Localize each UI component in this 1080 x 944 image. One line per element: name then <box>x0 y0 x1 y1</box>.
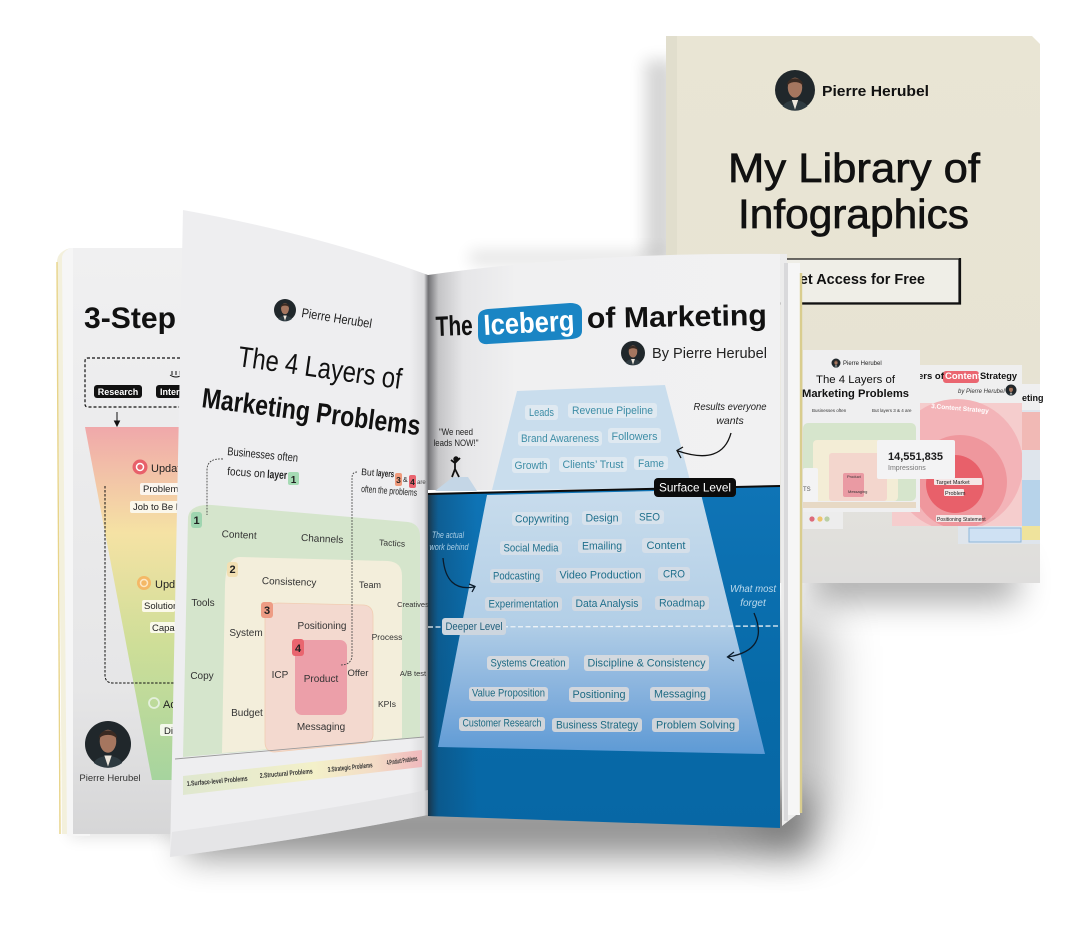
byline text: By Pierre Herubel <box>652 345 767 362</box>
middle chips: CRO <box>663 568 685 580</box>
tip chips: Clients’ Trust <box>562 459 624 471</box>
layer labels: Offer <box>348 668 368 679</box>
layer badges: 3 <box>264 605 270 617</box>
tip chips: Fame <box>638 458 664 470</box>
mini infographic: iceberg-side card: keting <box>1017 393 1044 403</box>
layer badges: 2 <box>229 564 236 576</box>
tip chips: Growth <box>514 460 548 472</box>
iceberg pill <box>478 303 582 344</box>
mini infographic: layers of content strategy: Content <box>945 371 982 382</box>
deeper level tag: Deeper Level <box>446 621 502 633</box>
left page sheet <box>73 248 190 834</box>
impressions stat card: 14,551,835 <box>888 451 943 463</box>
surface level tag <box>654 478 736 497</box>
note: layers three and four: are <box>417 480 426 486</box>
byline <box>621 341 767 365</box>
legend strip: 4.Product Problems <box>386 756 418 767</box>
middle chips: Copywriting <box>515 514 569 526</box>
tip chips: Leads <box>529 407 554 419</box>
deep chips: Problem Solving <box>656 720 735 732</box>
middle page: The 4 Layers of Marketing Problems <box>170 210 429 857</box>
deep chips: Discipline & Consistency <box>588 658 706 670</box>
divider above legend <box>175 737 424 759</box>
layer labels <box>190 529 429 733</box>
annotation: what most forget: What most <box>730 584 777 595</box>
layer two: yellow <box>222 557 402 753</box>
funnel item: update problems: Update <box>151 463 186 475</box>
funnel <box>85 427 195 780</box>
research box: Research <box>98 387 138 397</box>
down arrow <box>114 412 120 426</box>
note: layers three and four: 3 <box>396 475 401 485</box>
note: layers three and four: 4 <box>410 477 415 487</box>
note: layer one: 1 <box>291 475 297 486</box>
layer badges <box>191 512 304 656</box>
middle chips: Data Analysis <box>576 598 639 610</box>
layer badges: 4 <box>295 643 302 655</box>
mini infographic: layers of content strategy: ers of <box>918 371 945 382</box>
middle page author name: Pierre Herubel <box>301 305 373 331</box>
deep chips: Messaging <box>654 688 706 700</box>
mini infographic: the 4 layers of marketing problems: Marketing Problems <box>802 388 909 400</box>
funnel item: update problems <box>130 460 198 513</box>
annotation: results everyone wants: Results everyone <box>694 401 767 413</box>
legend strip: 3.Strategic Problems <box>327 762 373 774</box>
tip chips: Revenue Pipeline <box>572 405 653 417</box>
middle chips: Video Production <box>560 570 642 582</box>
layer labels: KPIs <box>378 699 396 709</box>
layer labels: Team <box>359 580 381 590</box>
title: of Marketing <box>587 300 767 335</box>
impressions stat card <box>877 440 955 479</box>
layer labels: A/B test <box>400 669 427 678</box>
title: Iceberg <box>483 305 575 342</box>
small stat card <box>803 468 818 502</box>
layer one: green <box>183 505 420 757</box>
layer three: peach <box>265 603 373 752</box>
small stat card: TS <box>803 487 811 493</box>
funnel item: add differentiation: Differentiation <box>164 726 222 737</box>
middle chips: Emailing <box>582 540 622 552</box>
right page edges <box>780 254 801 826</box>
cover author name: Pierre Herubel <box>822 83 929 100</box>
layer labels: Copy <box>190 671 214 682</box>
right page: The Iceberg of Marketing <box>428 254 780 828</box>
annotation: we need leads now: "We need <box>439 427 473 438</box>
middle page sheet <box>170 210 428 857</box>
mini infographic: the 4 layers of marketing problems: But layers 3 & 4 are <box>872 408 912 413</box>
layer labels: Content <box>221 529 257 542</box>
middle page avatar <box>274 299 296 321</box>
middle chips: Content <box>646 540 686 552</box>
mini infographic: layers of content strategy <box>891 365 1023 531</box>
left page: 3-Step infographic <box>73 248 222 834</box>
author row <box>274 299 373 331</box>
layer labels: Creatives <box>397 600 429 609</box>
cover avatar <box>775 70 815 111</box>
icon: stick figure with megaphone <box>451 457 460 477</box>
layer labels: Process <box>372 632 402 642</box>
annotation: results everyone wants <box>677 401 767 458</box>
left page author name: Pierre Herubel <box>79 773 141 784</box>
funnel item: update problems: Job to Be Done <box>133 502 198 513</box>
legend strip <box>183 750 422 795</box>
impressions stat card: Impressions <box>888 465 926 472</box>
left page author <box>79 721 141 784</box>
soft drop shadows <box>70 60 1017 857</box>
deep chips: Value Proposition <box>472 688 545 700</box>
mini infographic: layers of content strategy: Target Market <box>936 480 970 486</box>
note: layers three and four <box>361 467 426 499</box>
funnel item: add differentiation: Add <box>163 699 183 711</box>
left page avatar <box>85 721 131 768</box>
middle page title <box>200 341 422 441</box>
cover title: My Library of <box>728 145 981 191</box>
mini infographic: layers of content strategy: Problem <box>945 491 966 497</box>
layer labels: Tactics <box>379 537 405 549</box>
mini infographic: the 4 layers of marketing problems: The 4 Layers of <box>816 374 896 386</box>
layer labels: Tools <box>191 598 215 609</box>
tip chips: Followers <box>612 431 658 443</box>
deep chips: Systems Creation <box>490 658 566 670</box>
deeper level dashed line <box>428 626 780 627</box>
annotation: we need leads now: leads NOW!" <box>434 438 478 449</box>
cover button <box>770 258 960 304</box>
funnel item: update solution <box>137 576 201 634</box>
cover author <box>775 70 929 111</box>
surface line <box>428 486 780 494</box>
mini infographic: the 4 layers of marketing problems <box>802 350 920 512</box>
annotation: we need leads now <box>434 427 478 449</box>
mini infographic: the 4 layers of marketing problems: Messaging <box>848 489 867 494</box>
layer labels: Positioning <box>298 621 346 632</box>
byline avatar <box>621 341 645 365</box>
layer four: red <box>295 640 347 715</box>
note: layer one: layer <box>267 469 288 482</box>
small mound <box>435 477 477 491</box>
layer labels: Channels <box>301 533 344 546</box>
annotation: results everyone wants: wants <box>716 415 744 427</box>
note: layer one: focus on <box>227 466 266 481</box>
middle page title: Marketing Problems <box>200 382 422 441</box>
layer labels: Consistency <box>262 576 316 589</box>
note: layers three and four: layers <box>376 468 395 480</box>
layer badges: 1 <box>193 515 200 527</box>
tip chips <box>512 403 668 473</box>
title: The <box>435 310 473 342</box>
cover title: Infographics <box>738 191 969 237</box>
mini infographic: layers of content strategy: Positioning Statement <box>937 517 986 523</box>
middle chips: Experimentation <box>488 598 558 610</box>
note: layers three and four: often the problems <box>361 484 418 499</box>
mini infographic: iceberg-side card <box>958 384 1044 544</box>
tip chips: Brand Awareness <box>521 433 599 445</box>
annotation: the actual work behind: work behind <box>430 542 469 552</box>
funnel item: update problems: Problems <box>143 484 183 495</box>
left page title: 3-Step <box>84 302 176 335</box>
annotation: the actual work behind <box>430 530 475 592</box>
note: layer one <box>227 446 299 486</box>
legend strip: 1.Surface-level Problems <box>187 776 248 788</box>
layer labels: ICP <box>272 670 289 681</box>
middle page title: The 4 Layers of <box>236 341 405 396</box>
note: layers three and four: & <box>403 477 408 484</box>
middle chips: Design <box>586 512 618 524</box>
dashed feedback line <box>105 486 195 683</box>
right page sheet <box>428 254 780 490</box>
sea <box>428 486 780 828</box>
middle chips: Podcasting <box>493 570 540 582</box>
legend strip: 2.Structural Problems <box>260 768 313 780</box>
research box: Interviews <box>160 387 204 397</box>
layer labels: System <box>229 628 263 639</box>
layer labels: Messaging <box>297 722 345 733</box>
funnel item: update solution: Solution <box>144 601 178 612</box>
mini infographic: layers of content strategy: by Pierre Herubel <box>958 389 1005 395</box>
mini infographic: the 4 layers of marketing problems: Businesses often <box>812 408 847 413</box>
mini infographic: the 4 layers of marketing problems: Pierre Herubel <box>843 361 882 367</box>
cover button: Get Access for Free <box>789 272 925 288</box>
middle chips: Social Media <box>504 542 559 554</box>
note: layer one: Businesses often <box>227 446 299 465</box>
iceberg body <box>438 490 765 754</box>
note: layers three and four: But <box>361 467 375 479</box>
deeper level tag <box>442 618 506 635</box>
deep chips: Positioning <box>572 689 626 701</box>
deep chips: Business Strategy <box>556 720 638 732</box>
mini dots card <box>803 512 843 529</box>
funnel item: update solution: Update <box>155 579 190 591</box>
deep chips <box>459 655 739 732</box>
layer labels: Product <box>304 674 338 685</box>
surface level tag: Surface Level <box>659 480 731 494</box>
back book: My Library of Infographics cover <box>666 36 1044 583</box>
mini infographic: layers of content strategy: Strategy <box>980 371 1018 382</box>
deep chips: Customer Research <box>462 718 542 730</box>
middle chips <box>485 510 709 611</box>
funnel item: update solution: Capabilities <box>152 623 201 634</box>
annotation: the actual work behind: The actual <box>432 530 465 540</box>
annotation: what most forget: forget <box>740 598 767 609</box>
book cover panel <box>666 36 1040 583</box>
mini infographic: layers of content strategy: 3.Content Strategy <box>931 403 989 415</box>
connector lines <box>207 459 357 665</box>
funnel item: add differentiation <box>149 698 222 737</box>
research box <box>85 358 204 407</box>
iceberg tip <box>492 385 692 490</box>
annotation: what most forget <box>728 584 777 661</box>
layer labels: Budget <box>231 708 263 719</box>
middle chips: Roadmap <box>659 598 705 610</box>
title <box>435 300 767 344</box>
mini infographic: the 4 layers of marketing problems: Product <box>847 474 862 479</box>
left book page edges <box>57 248 90 836</box>
middle chips: SEO <box>639 512 660 524</box>
